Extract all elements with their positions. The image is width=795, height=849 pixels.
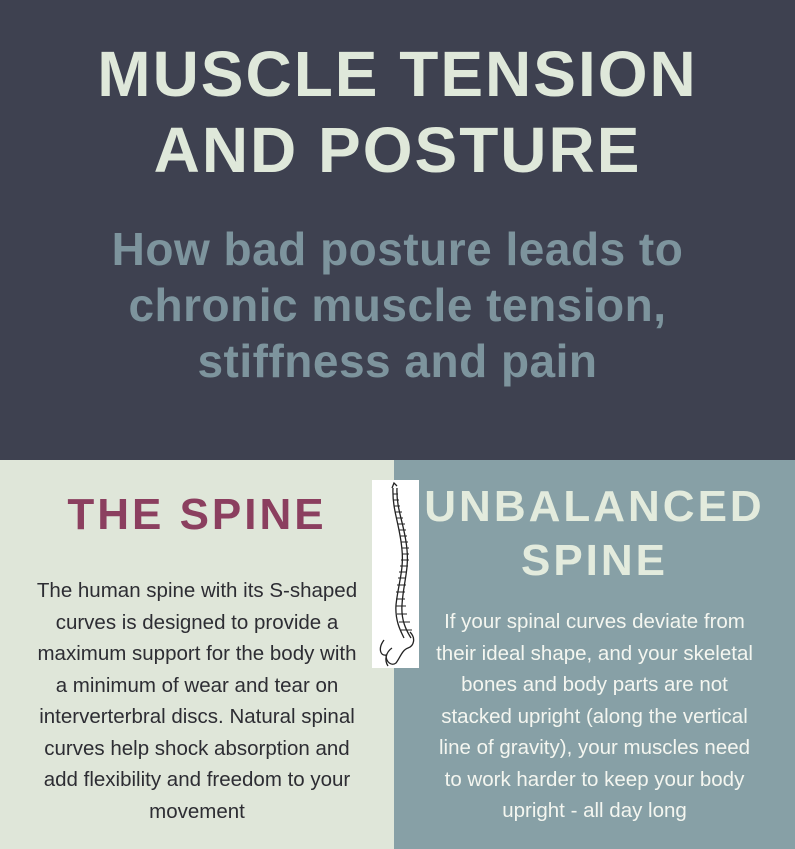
panel: unbalanced spine: [394, 460, 795, 849]
heading: the spine: THE SPINE: [67, 490, 327, 539]
icon: spine illustration: [372, 480, 419, 668]
text: spine description: curves help shock absorption and: [44, 736, 350, 760]
heading: unbalanced spine: [424, 482, 765, 585]
text: spine description: a minimum of wear and tear on: [56, 674, 338, 696]
text: unbalanced description: their ideal shape, and your skeletal: [436, 642, 753, 664]
text: spine description: maximum support for the body with: [37, 642, 357, 665]
subtitle: How bad posture leads to: [112, 223, 683, 275]
subtitle: [112, 223, 683, 387]
panel: the spine: [0, 460, 394, 849]
heading: unbalanced spine: UNBALANCED: [424, 482, 765, 531]
text: spine description: [37, 579, 357, 822]
text: spine description: curves is designed to provide a: [56, 610, 338, 634]
heading: unbalanced spine: SPINE: [521, 536, 668, 585]
subtitle: chronic muscle tension,: [128, 279, 667, 331]
text: spine description: movement: [149, 800, 245, 822]
title: AND POSTURE: [154, 114, 641, 186]
text: unbalanced description: bones and body parts are not: [461, 673, 728, 696]
text: spine description: add flexibility and freedom to your: [44, 768, 350, 791]
text: unbalanced description: upright - all day long: [502, 799, 687, 822]
text: spine description: The human spine with its S-shaped: [37, 579, 357, 602]
subtitle: stiffness and pain: [197, 335, 598, 387]
title: [97, 38, 698, 186]
title: MUSCLE TENSION: [97, 38, 698, 110]
text: unbalanced description: If your spinal curves deviate from: [444, 610, 745, 633]
text: unbalanced description: [436, 610, 753, 822]
text: unbalanced description: line of gravity), your muscles need: [439, 736, 750, 759]
header band: [0, 0, 795, 460]
text: unbalanced description: stacked upright (along the vertical: [441, 704, 748, 728]
text: unbalanced description: to work harder to keep your body: [445, 768, 744, 790]
text: spine description: interverterbral discs. Natural spinal: [39, 705, 355, 728]
